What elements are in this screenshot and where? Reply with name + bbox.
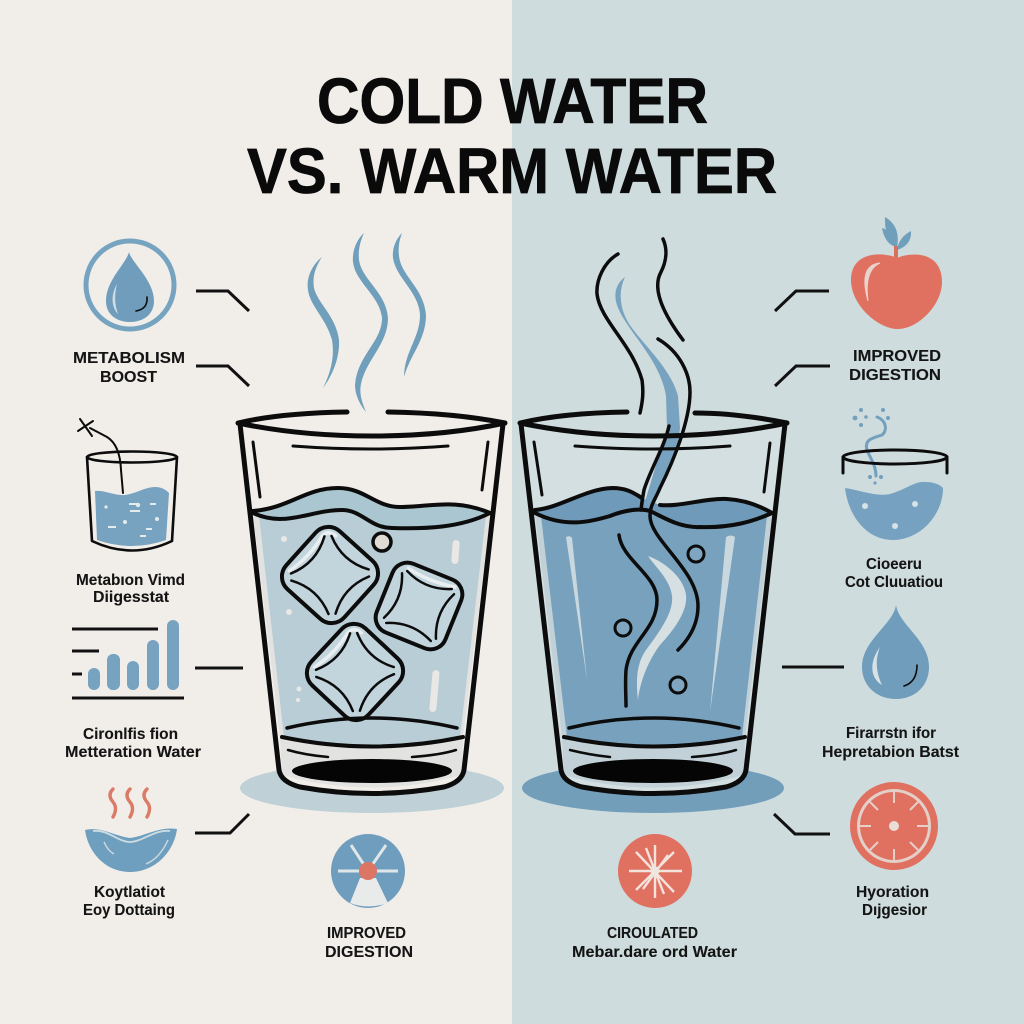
label: koytlatiot: Koytlatiot: [94, 884, 166, 901]
icon: coral starburst circle: [618, 834, 692, 908]
glass body: [240, 424, 503, 794]
leader line 4 left: [195, 814, 249, 833]
icon: apple: [851, 217, 942, 329]
label: metablon vimd: Metabıon Vimd: [76, 572, 185, 589]
label: metabolism boost: BOOST: [100, 369, 157, 386]
label: hyoration: Dıjgesior: [862, 902, 927, 919]
water: [541, 510, 767, 746]
label: improved digestion right: [849, 348, 941, 384]
icon: grapefruit slice: [850, 782, 938, 870]
label: improved digestion right: DIGESTION: [849, 367, 941, 384]
icon: water drop in circle: [86, 241, 174, 329]
warm glass: [520, 239, 787, 813]
ice cube 3: [300, 617, 410, 727]
background: cold side: [0, 0, 512, 1024]
water surface: [535, 488, 772, 527]
warm steam: [615, 277, 680, 510]
label: metablon vimd: Diigesstat: [93, 589, 170, 606]
label: cioeeru: Cioeeru: [866, 556, 922, 573]
water surface: [253, 488, 490, 528]
label: firarrstn: Firarrstn ifor: [846, 725, 936, 742]
label: improved digestion right: IMPROVED: [853, 348, 941, 365]
leader line 2 right: [775, 366, 830, 386]
label: metablon vimd: [76, 572, 185, 606]
leader line 3 left: [195, 666, 243, 670]
label: metabolism boost: METABOLISM: [73, 350, 185, 367]
water swirl ribbon: [637, 556, 686, 700]
label: koytlatiot: Eoy Dottaing: [83, 902, 175, 919]
label: cironlfis fion: Metteration Water: [65, 744, 201, 761]
glass outlines: [520, 412, 787, 794]
label: cioeeru: [845, 556, 943, 591]
cold steam: [308, 233, 426, 412]
label: cioeeru: Cot Cluuatiou: [845, 574, 943, 591]
title: COLD WATER: [317, 65, 708, 137]
glass shadow: [522, 763, 784, 813]
label: metabolism boost: [73, 350, 185, 386]
warm bubbles: [615, 546, 704, 693]
label: firarrstn: Hepretabion Batst: [822, 744, 960, 761]
leader line 3 right: [782, 666, 844, 668]
title: VS. WARM WATER: [247, 135, 777, 207]
air bubble: [373, 533, 391, 551]
icon: steaming bowl: [85, 789, 177, 872]
icon: bar chart: [72, 620, 184, 698]
label: circulated: CIROULATED: [607, 925, 698, 942]
label: improved digestion bottom left: DIGESTION: [325, 944, 413, 961]
glass outlines: [238, 412, 505, 794]
background: warm side: [512, 0, 1024, 1024]
icon: water drop right: [862, 605, 929, 699]
icon: blue circle with spokes: [331, 834, 405, 908]
label: cironlfis fion: [65, 726, 201, 761]
title: [247, 65, 777, 207]
label: improved digestion bottom left: [325, 925, 413, 961]
glass body: [522, 424, 785, 794]
label: hyoration: [856, 884, 929, 919]
icon: small glass with straw: [78, 419, 177, 550]
label: hyoration: Hyoration: [856, 884, 929, 901]
label: firarrstn: [822, 725, 960, 761]
leader line 4 right: [774, 814, 830, 834]
ice cube 2: [371, 558, 467, 654]
highlights and bubbles: [281, 536, 460, 712]
leader line 1 right: [775, 291, 829, 311]
label: circulated: [572, 925, 737, 961]
label: cironlfis fion: Cironlfis fion: [83, 726, 178, 743]
water highlights: [566, 536, 735, 712]
water: [259, 510, 486, 746]
ice cube 1: [275, 520, 385, 630]
leader line 2 left: [196, 366, 249, 386]
label: koytlatiot: [83, 884, 175, 919]
leader line 1 left: [196, 291, 249, 311]
label: improved digestion bottom left: IMPROVED: [327, 925, 406, 942]
label: circulated: Mebar.dare ord Water: [572, 944, 737, 961]
black base: [292, 759, 452, 783]
cold glass: [238, 412, 505, 813]
black base: [573, 759, 733, 783]
glass shadow: [240, 763, 504, 813]
icon: bowl with steam: [843, 408, 947, 540]
